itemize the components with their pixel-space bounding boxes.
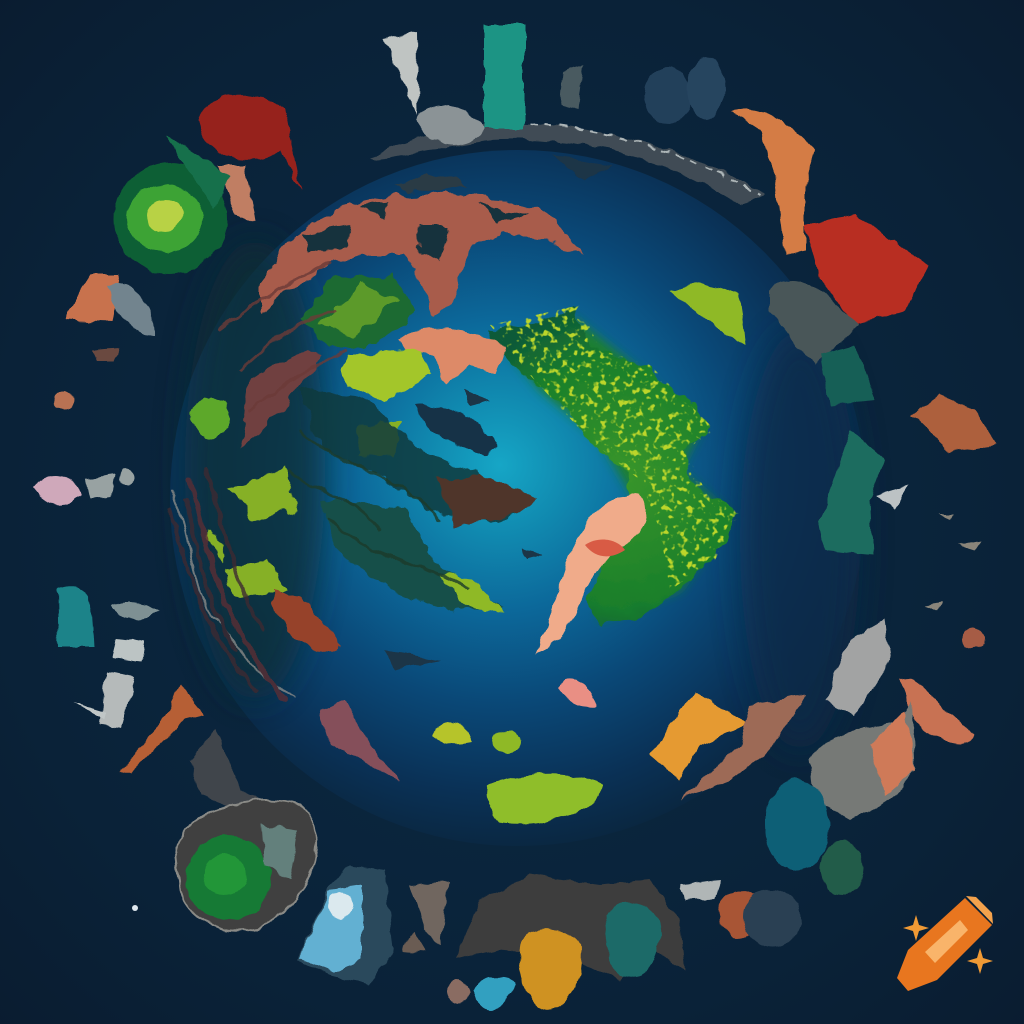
star dot — [132, 905, 138, 911]
debris: bottom cluster — [410, 875, 685, 1011]
continent: left green mixed lands — [193, 275, 540, 650]
tangled brown lines left — [170, 262, 470, 700]
continent: orange peninsula — [536, 494, 646, 655]
globe — [170, 150, 866, 846]
land speckle — [490, 305, 740, 590]
continent: top red landmass — [262, 170, 582, 318]
continent: central orange land — [398, 329, 505, 385]
debris: top arc — [372, 24, 765, 205]
debris: bottom left capsule — [175, 728, 426, 985]
peninsula red patch — [585, 540, 625, 556]
globe left dark tint — [185, 240, 325, 700]
debris: right side — [732, 109, 997, 650]
continent: right green land — [488, 305, 740, 625]
islands — [320, 155, 746, 824]
icon: crayon logo — [897, 896, 993, 991]
debris: top left red and green pods — [55, 95, 300, 409]
globe right shadow — [740, 330, 860, 750]
continent glow: right green land — [500, 318, 730, 620]
debris: left items — [33, 469, 205, 775]
debris: bottom right cluster — [650, 620, 976, 947]
